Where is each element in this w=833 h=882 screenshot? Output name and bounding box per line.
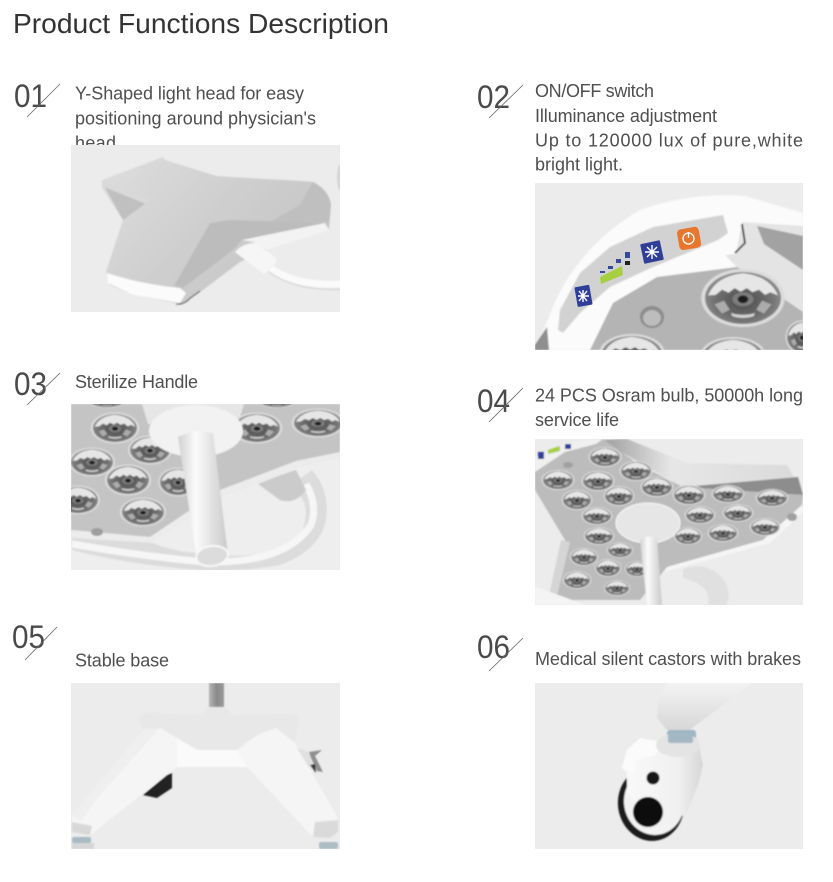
lenses (600, 268, 803, 350)
panel: control panel and switch (535, 183, 803, 350)
description 02 (535, 81, 803, 174)
wing nut (297, 748, 323, 773)
number 05: 05 (12, 619, 45, 655)
feature 02 (478, 84, 803, 350)
description 03: Sterilize Handle (75, 372, 198, 392)
description 06: Medical silent castors with brakes (535, 649, 801, 669)
number 03: 03 (14, 366, 47, 402)
icon: power button (676, 226, 702, 251)
icon: light mode (574, 285, 593, 307)
description 01: head (75, 133, 116, 153)
description 04: 24 PCS Osram bulb, 50000h long (535, 386, 803, 406)
description 04 (535, 386, 803, 430)
description 01: Y-Shaped light head for easy (75, 84, 304, 104)
sensor button (640, 306, 664, 328)
description 04: service life (535, 410, 619, 430)
feature 04 (477, 383, 803, 605)
number 02: 02 (477, 79, 510, 115)
icon: level indicators (600, 252, 630, 284)
foot right (319, 842, 338, 849)
description 01 (75, 84, 316, 153)
panel: stable base (71, 683, 340, 849)
title: Product Functions Description (13, 8, 389, 39)
description 05: Stable base (75, 650, 169, 670)
number 04: 04 (477, 383, 510, 419)
number 06 (477, 629, 523, 671)
description 02: ON/OFF switch (535, 81, 654, 101)
number 01: 01 (14, 78, 47, 114)
panel: y-shaped light head (71, 145, 342, 312)
feature 06 (477, 629, 803, 849)
description 01: positioning around physician's (75, 108, 316, 128)
feature 03 (14, 366, 344, 570)
panel: castors (535, 682, 803, 849)
number 05 (12, 619, 57, 660)
feature 05 (12, 619, 340, 849)
panel: osram bulbs (535, 439, 803, 605)
description 02: Illuminance adjustment (535, 106, 717, 126)
foot left (72, 837, 94, 849)
description 02: bright light. (535, 154, 623, 174)
number 06: 06 (477, 629, 510, 665)
panel: sterilize handle (71, 404, 340, 570)
feature 01 (14, 78, 342, 312)
icon: brightness (640, 240, 664, 264)
description 02: Up to 120000 lux of pure,white (535, 130, 803, 150)
